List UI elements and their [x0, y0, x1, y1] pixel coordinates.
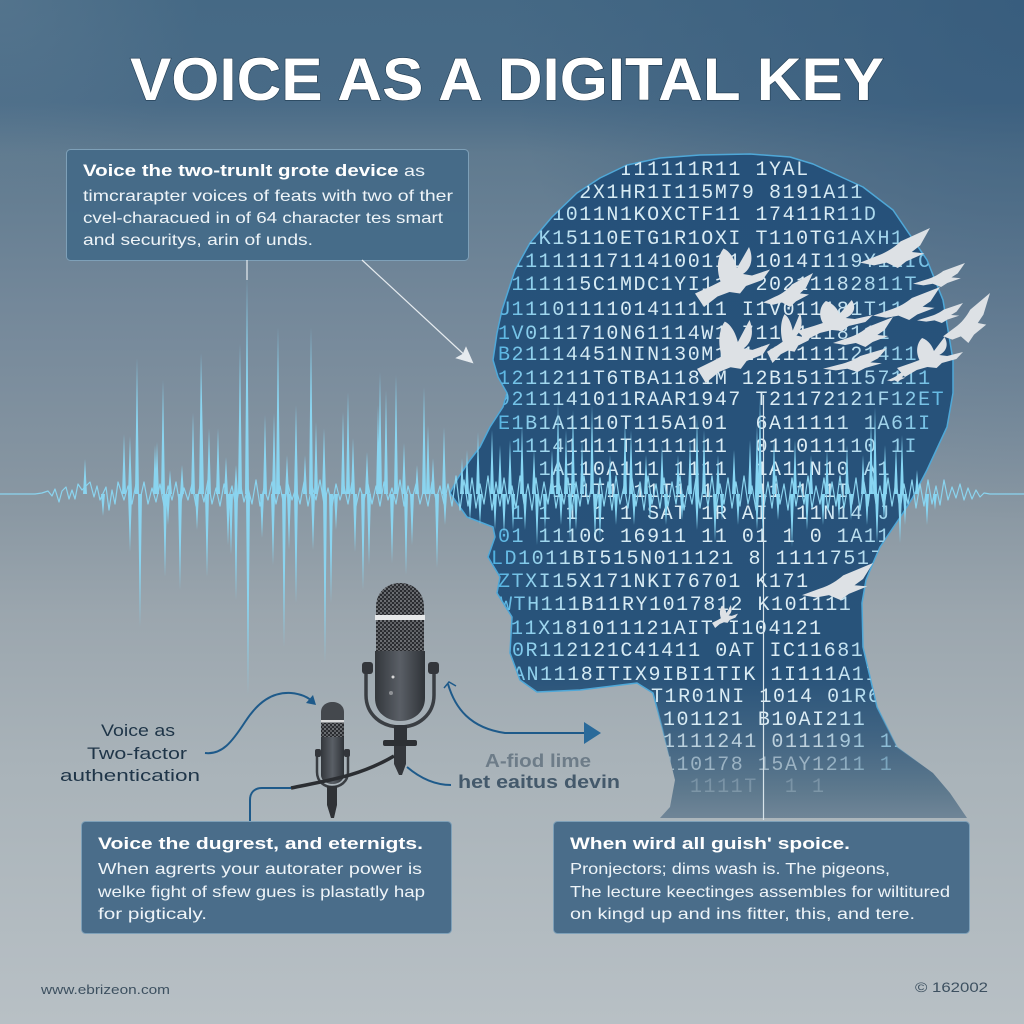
- binary character grid: 01 1110C 16911 11 01 1 0 1A110 1: [498, 526, 932, 549]
- panel: bottom left: [82, 822, 452, 934]
- binary character grid: 1111241 0111191 11: [663, 731, 907, 754]
- arrow: microphone to head: [444, 682, 601, 744]
- panel: bottom left: welke fight of sfew gues is plastatly hap: [97, 884, 425, 901]
- binary character grid: I11111R11 1YAL: [498, 159, 810, 182]
- callout: top description: cvel-characued in of 64 character tes smart: [83, 210, 444, 227]
- callout: top description: and securitys, arin of unds.: [83, 232, 313, 249]
- head shape: [450, 154, 967, 818]
- tapered spikes: [83, 277, 464, 494]
- panel: bottom right: on kingd up and ins fitter, this, and tere.: [570, 906, 915, 923]
- panel: bottom right: The lecture keectinges assembles for wiltitured: [570, 884, 950, 901]
- baseline signal band: [0, 476, 1024, 510]
- binary character grid: WTH111B11RY1017812 K101111: [500, 594, 852, 617]
- label: voice as two-factor authentication: Voice as: [101, 721, 175, 740]
- vertical white guide line through head: [762, 395, 764, 820]
- binary character grid: 9211141011RAAR1947 T21172121F12ET: [498, 389, 945, 412]
- callout: top description: timcrarapter voices of feats with two of ther: [83, 188, 454, 205]
- downward spikes: [101, 494, 447, 695]
- white line from callout to waveform peak: [246, 260, 248, 280]
- binary character grid: 1A110A111 1111 1A11N10 A1: [498, 459, 891, 482]
- spikes crossing the head: [465, 397, 937, 547]
- label: device note: [458, 751, 620, 792]
- arrow: label to small microphone: [205, 693, 316, 753]
- arrow: callout to face: [362, 260, 473, 363]
- binary character grid: ZTXI15X171NKI76701 K171: [498, 571, 810, 594]
- panel: bottom left: Voice the dugrest, and eternigts.: [98, 835, 423, 853]
- binary character grid: LK15110ETG1R1OXI T110TG1AXH1: [498, 228, 905, 251]
- binary character grid: 110178 15AY1211 1: [663, 754, 893, 777]
- binary character grid: 1I1T1 11I1 1 11 1 1I: [498, 481, 850, 504]
- title: VOICE AS A DIGITAL KEY: [130, 46, 884, 113]
- binary character grid: 111115C1MDC1YI111 20211182811T: [498, 274, 918, 297]
- callout: top description: [66, 150, 468, 260]
- binary character grid: 1 1 1 1 1 SAT 1R AI 11N14 J: [498, 503, 891, 526]
- binary character grid: U1110111101411111 I1V011181T11: [498, 299, 905, 322]
- panel: bottom right: Pronjectors; dims wash is. The pigeons,: [570, 861, 890, 878]
- binary character grid: 1211211T6TBA1181M 12B15111157111: [498, 368, 932, 391]
- flock of white birds: [695, 228, 990, 628]
- binary character grid: AN1118ITIX9IBI1TIK 1I111A1I: [513, 664, 879, 687]
- binary character grid: 2X1HR1I115M79 8191A11: [498, 182, 864, 205]
- callout: top description: Voice the two-trunlt grote device as: [83, 162, 425, 180]
- binary character grid: 1V0111710N61114W1 71111118111: [498, 323, 891, 346]
- binary character grid: [491, 159, 945, 799]
- binary character grid: 1111T 1 1: [690, 776, 826, 799]
- binary character grid: E1B1A1110T115A101 6A11111 1A61I: [498, 413, 932, 436]
- binary character grid: B21114451NIN130M1 1111111121411: [498, 344, 918, 367]
- small microphone with cable: [250, 702, 394, 821]
- binary character grid: 1011N1KOXCTF11 17411R11D: [498, 204, 877, 227]
- footer: website: www.ebrizeon.com: [40, 982, 170, 997]
- binary character grid: 11141111T1111111 011011110 1I: [498, 436, 918, 459]
- binary character grid: 0R112121C41411 0AT IC116811: [512, 640, 878, 663]
- panel: bottom right: When wird all guish' spoice.: [570, 835, 850, 853]
- large studio microphone: [362, 583, 439, 775]
- binary character grid: 11111117114100111 1014I119Y11IC: [498, 251, 932, 274]
- sound waveform: [0, 277, 1024, 695]
- connector line: microphone to label: [407, 767, 451, 785]
- panel: bottom left: for pigticaly.: [98, 906, 207, 923]
- binary character grid: T1R01NI 1014 01R6: [651, 686, 881, 709]
- label: voice as two-factor authentication: Two-factor: [87, 744, 187, 763]
- label: voice as two-factor authentication: [60, 721, 200, 785]
- panel: bottom left: When agrerts your autorater power is: [98, 861, 422, 878]
- footer: copyright: © 162002: [915, 979, 988, 995]
- binary character grid: 101121 B10AI211: [663, 709, 866, 732]
- panel: bottom right: [554, 822, 970, 934]
- label: voice as two-factor authentication: authentication: [60, 766, 200, 785]
- binary character grid: 11X181011121AIT I104121: [511, 618, 823, 641]
- label: device note: A-fiod lime: [485, 751, 591, 771]
- head silhouette with binary data: [450, 154, 967, 818]
- binary character grid: LD1011BI515N011121 8 11117517: [491, 548, 884, 571]
- label: device note: het eaitus devin: [458, 772, 620, 792]
